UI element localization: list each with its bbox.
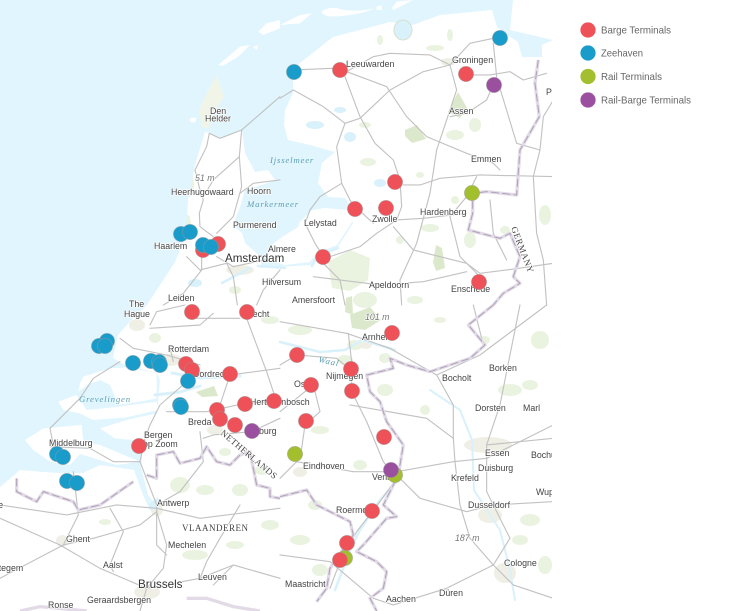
place labels: Haarlem [154, 241, 187, 251]
place labels: Nijmegen [326, 371, 363, 381]
place labels: Leuven [198, 572, 227, 582]
place labels: Hague [124, 309, 150, 319]
place labels: Arnhem [362, 332, 393, 342]
place labels: Assen [449, 106, 474, 116]
place labels: Heerhugowaard [171, 187, 234, 197]
place labels [0, 55, 576, 610]
place labels: NETHERLANDS [219, 428, 280, 481]
place labels: Ronse [48, 600, 74, 610]
place labels: Breda [188, 417, 212, 427]
place labels: op Zoom [143, 439, 178, 449]
place labels: Ghent [66, 534, 91, 544]
legend item: barge terminals: Barge Terminals [601, 24, 671, 36]
place labels: Maastricht [285, 579, 326, 589]
place labels: Hilversum [262, 277, 301, 287]
place labels: Bocholt [442, 373, 472, 383]
place labels: Enschede [451, 284, 490, 294]
national borders [17, 60, 539, 611]
place labels: Amsterdam [225, 252, 284, 265]
place labels: Cologne [504, 558, 537, 568]
place labels: Markermeer [246, 199, 299, 209]
place labels: Venlo [372, 472, 394, 482]
place labels: Hoorn [247, 186, 271, 196]
place labels: Tilburg [250, 426, 277, 436]
place labels: 51 m [195, 173, 215, 183]
place labels: Den [210, 106, 226, 116]
place labels: Dordrecht [193, 369, 232, 379]
place labels: Mechelen [168, 540, 206, 550]
place labels: Brussels [138, 578, 183, 591]
legend item: zeehaven: Zeehaven [601, 48, 643, 60]
lakes and rivers [148, 20, 515, 600]
vegetation and urban patches [56, 29, 552, 599]
place labels: Hardenberg [420, 207, 467, 217]
rail terminal markers [287, 185, 480, 566]
place labels: Eindhoven [303, 461, 345, 471]
place labels: Ijsselmeer [269, 155, 314, 165]
place labels: Aachen [386, 594, 416, 604]
place labels: Almere [268, 244, 296, 254]
place labels: Krefeld [451, 473, 479, 483]
place labels: Utrecht [241, 309, 270, 319]
place labels: Roermond [336, 505, 377, 515]
place labels: Düren [439, 588, 463, 598]
place labels: Helder [205, 114, 231, 124]
place labels: Dusseldorf [468, 500, 511, 510]
place labels: P [546, 87, 552, 97]
islands and polders [25, 0, 413, 465]
place labels: Borken [489, 363, 517, 373]
place labels: Emmen [471, 154, 501, 164]
map of the Netherlands [0, 0, 552, 611]
place labels: Aalst [103, 560, 123, 570]
place labels: Marl [523, 403, 540, 413]
place labels: Waal [318, 354, 340, 368]
sea and inland water [0, 0, 553, 510]
place labels: Leiden [168, 293, 195, 303]
land background [0, 0, 552, 611]
place labels: The [129, 299, 144, 309]
place labels: Grevelingen [79, 394, 131, 404]
place labels: Oss [294, 379, 310, 389]
zeehaven markers [49, 30, 508, 491]
rail-barge terminal markers [244, 77, 502, 478]
place labels: Dorsten [475, 403, 506, 413]
place labels: Rotterdam [168, 344, 209, 354]
place labels: Groningen [452, 55, 493, 65]
place labels: 187 m [455, 533, 479, 543]
place labels: Middelburg [49, 438, 93, 448]
barge terminal markers [131, 62, 487, 568]
place labels: GERMANY [509, 225, 536, 274]
road network [0, 38, 553, 611]
legend item: rail-barge terminals: Rail-Barge Terminals [601, 94, 691, 106]
place labels: Apeldoorn [369, 280, 409, 290]
place labels: Leeuwarden [346, 59, 395, 69]
place labels: 101 m [365, 312, 389, 322]
place labels: VLAANDEREN [182, 523, 248, 533]
place labels: Antwerp [157, 498, 189, 508]
place labels: Bergen [144, 430, 172, 440]
place labels: Essen [485, 448, 510, 458]
place labels: Purmerend [233, 220, 277, 230]
place labels: Amersfoort [292, 295, 336, 305]
place labels: Geraardsbergen [87, 595, 151, 605]
place labels: 's-Hertogenbosch [241, 397, 310, 407]
place labels: Duisburg [478, 463, 513, 473]
place labels: Lelystad [304, 218, 337, 228]
place labels: Zwolle [372, 214, 398, 224]
legend item: rail terminals: Rail Terminals [601, 71, 662, 83]
